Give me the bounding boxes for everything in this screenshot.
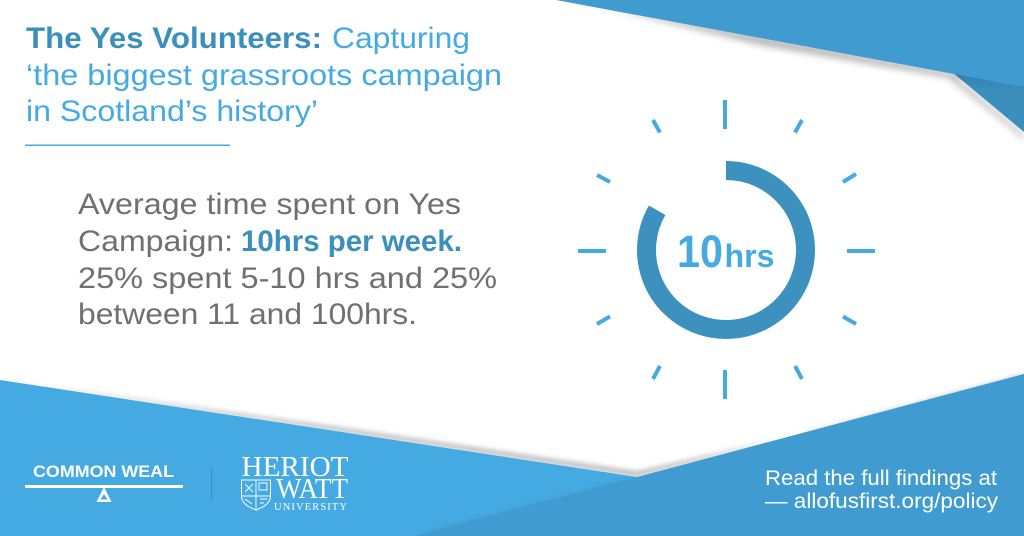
ring label: 10hrs: 10 (677, 226, 723, 277)
ring label: 10hrs (677, 226, 774, 277)
body text: between 11 and 100hrs. (78, 298, 417, 331)
title: The Yes Volunteers: (26, 22, 322, 55)
title underline (25, 144, 230, 146)
progress ring (646, 170, 805, 330)
logo divider (211, 468, 212, 500)
bottom banner (0, 374, 1024, 536)
top right folded banner (556, 0, 1024, 140)
body text (78, 188, 497, 331)
body text: 25% spent 5-10 hrs and 25% (78, 262, 497, 295)
title: Capturing (332, 22, 470, 55)
logo: Heriot Watt University: HERIOT (242, 452, 348, 483)
logo: Heriot Watt University: WATT (276, 474, 348, 505)
body text: Campaign: (78, 225, 233, 258)
logo: Common Weal (25, 462, 183, 502)
title (26, 22, 502, 128)
logo: Heriot Watt University (242, 452, 348, 513)
ring label: 10hrs: hrs (724, 238, 774, 274)
body text: Average time spent on Yes (78, 188, 461, 221)
body text: 10hrs per week. (241, 225, 462, 258)
footer call to action: — allofusfirst.org/policy (765, 490, 999, 513)
title: ‘the biggest grassroots campaign (26, 59, 502, 92)
footer call to action (765, 467, 999, 513)
clock ticks (578, 100, 875, 399)
logo: Common Weal: COMMON WEAL (33, 462, 174, 481)
icon: university crest (242, 480, 270, 510)
title: in Scotland’s history’ (26, 95, 318, 128)
logo: Heriot Watt University: UNIVERSITY (274, 502, 347, 513)
footer call to action: Read the full findings at (765, 467, 997, 490)
